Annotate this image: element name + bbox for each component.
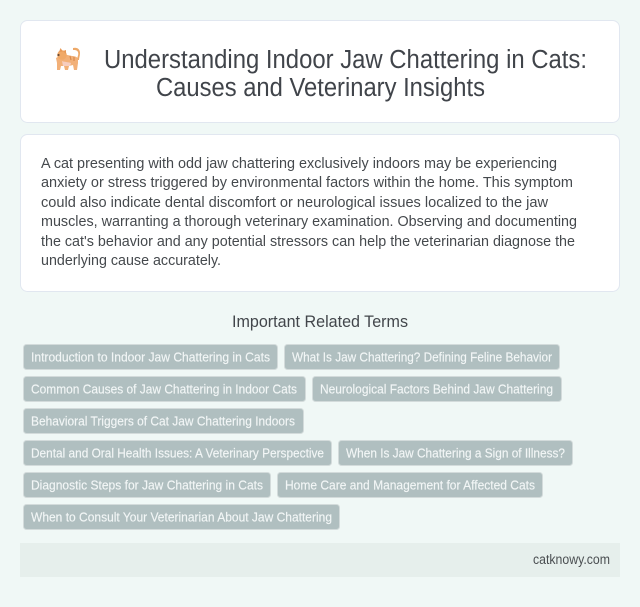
description text: underlying cause accurately. (41, 253, 221, 269)
tag (24, 376, 306, 402)
description text: muscles, warranting a thorough veterinary examination. Observing and documenting (41, 214, 577, 230)
tag (312, 376, 562, 402)
tag: Dental and Oral Health Issues: A Veterinary Perspective (31, 446, 324, 460)
tag: Diagnostic Steps for Jaw Chattering in Cats (31, 478, 263, 492)
description text: could also indicate dental discomfort or neurological issues localized to the jaw (41, 195, 548, 211)
tag (284, 344, 560, 370)
description text: A cat presenting with odd jaw chattering exclusively indoors may be experiencing (41, 156, 557, 172)
tag: Introduction to Indoor Jaw Chattering in Cats (31, 350, 270, 364)
tag: When to Consult Your Veterinarian About Jaw Chattering (31, 510, 332, 524)
description text: the cat's behavior and any potential stressors can help the veterinarian diagnose the (41, 234, 575, 250)
footer (20, 543, 620, 577)
tag: Neurological Factors Behind Jaw Chattering (320, 382, 553, 396)
title text: Causes and Veterinary Insights (156, 74, 485, 102)
tag: Home Care and Management for Affected Cats (285, 478, 535, 492)
footer site name: catknowy.com (533, 552, 610, 567)
tag: Common Causes of Jaw Chattering in Indoor Cats (31, 382, 297, 396)
description text (41, 156, 577, 269)
tag (24, 472, 270, 498)
panel: description card (20, 134, 620, 292)
tag (24, 504, 340, 530)
panel: related term tags (24, 344, 572, 530)
tag: When Is Jaw Chattering a Sign of Illness? (346, 446, 565, 460)
icon: cat (56, 48, 80, 70)
heading: related terms: Important Related Terms (232, 313, 408, 331)
title text (104, 46, 587, 102)
tag (24, 344, 278, 370)
tag (278, 472, 542, 498)
tag: What Is Jaw Chattering? Defining Feline Behavior (292, 350, 553, 364)
title text: Understanding Indoor Jaw Chattering in Cats: (104, 46, 587, 74)
description text: anxiety or stress triggered by environmental factors within the home. This symptom (41, 175, 573, 191)
panel: title card (20, 20, 620, 122)
tag (24, 408, 304, 434)
tag (338, 440, 572, 466)
tag (24, 440, 332, 466)
tag: Behavioral Triggers of Cat Jaw Chattering Indoors (31, 414, 295, 428)
